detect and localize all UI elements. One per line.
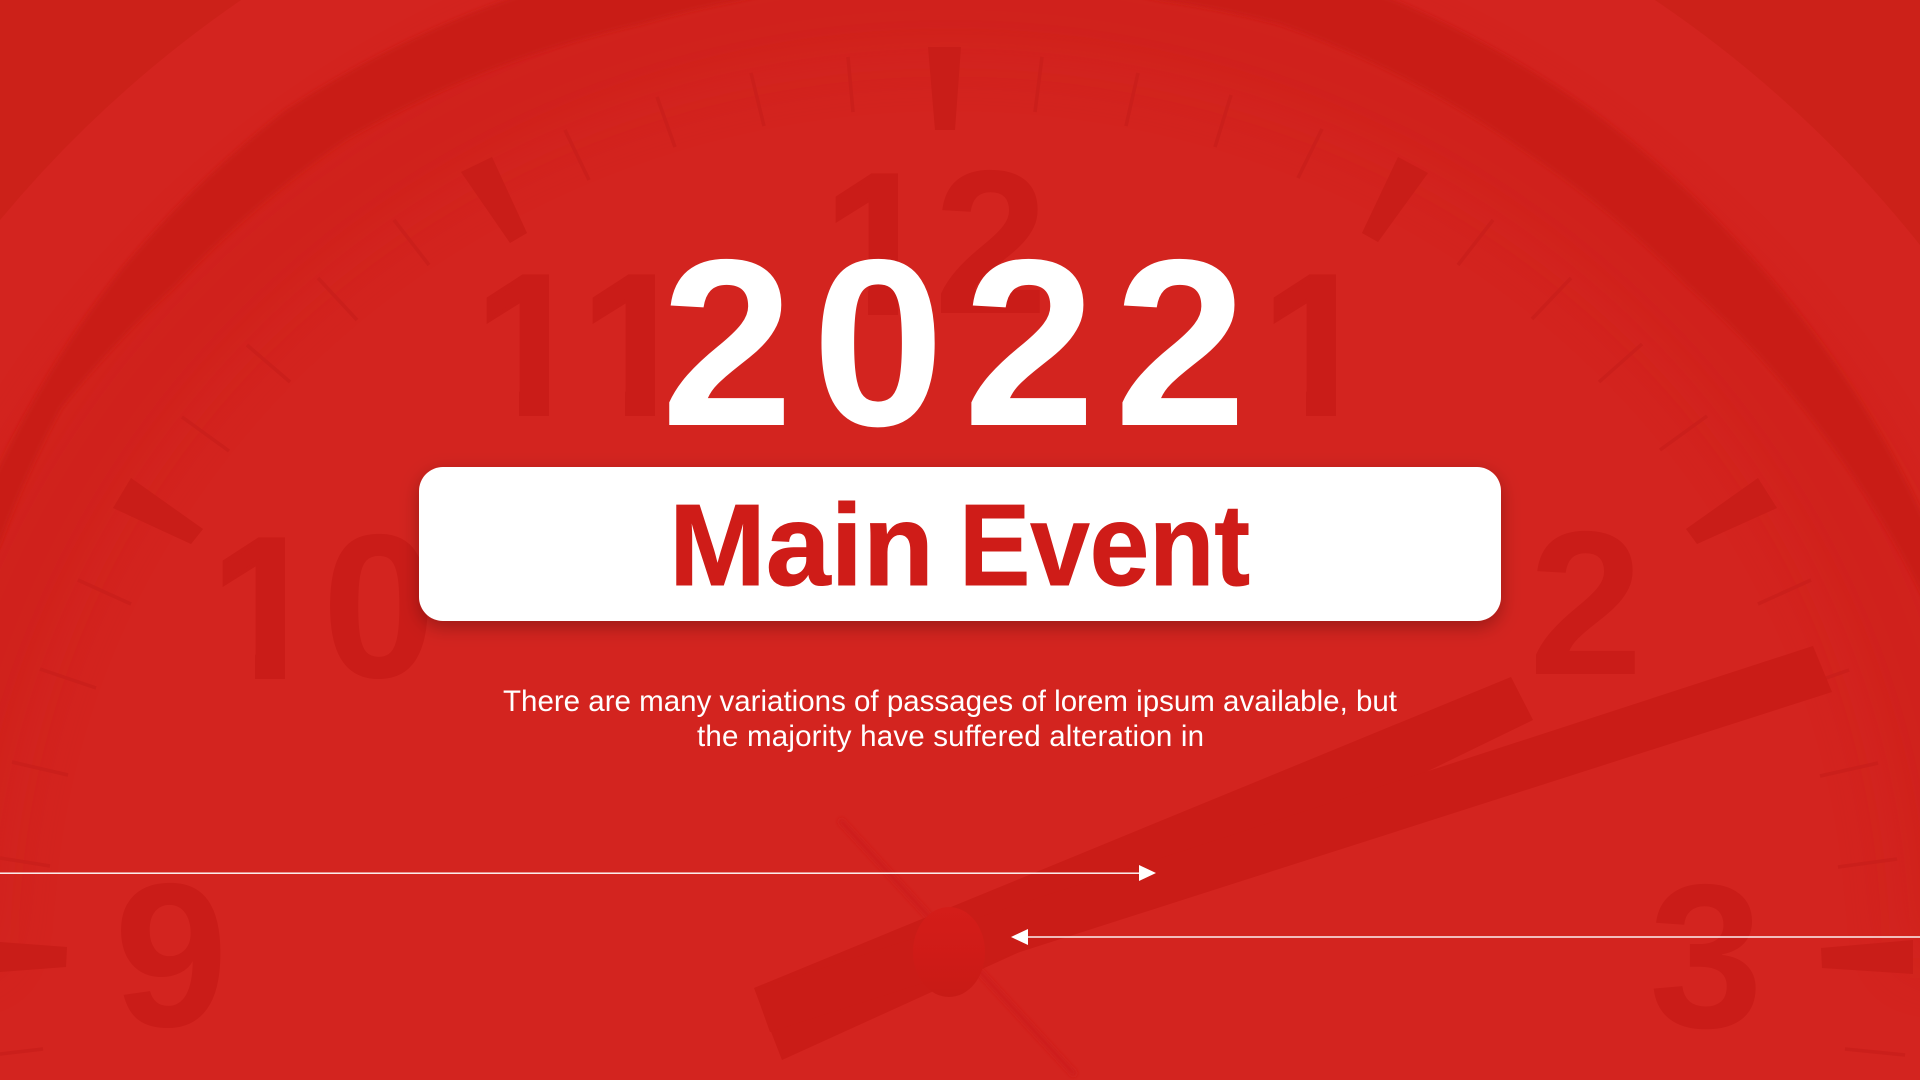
banner title: Main [669,480,934,610]
title banner [419,467,1501,621]
clock numerals [114,128,1763,1071]
clock numerals: 0 [322,492,436,721]
clock surround: top-left corner [0,0,241,220]
description text: the majority have suffered alteration in [697,720,1204,753]
year heading: 2022 [661,211,1265,476]
banner title [669,480,1250,610]
clock second hand [840,820,1075,1075]
banner title: Event [959,480,1250,610]
clock numerals: 3 [1649,842,1763,1071]
description text [503,685,1397,753]
arrow: left-pointing [1011,929,1920,945]
description text: There are many variations of passages of lorem ipsum available, but [503,685,1397,718]
clock minute hand [755,646,1832,1032]
clock numerals: 9 [114,841,228,1070]
clock numerals: 1 [475,234,586,457]
clock numerals: 1 [211,497,322,720]
arrow: right-pointing [0,865,1156,881]
clock numerals: 1 [824,133,935,356]
clock numerals: 2 [1529,489,1643,718]
clock outer ring [0,0,1920,650]
clock surround: top-right corner [1655,0,1920,245]
clock numerals: 1 [581,234,692,457]
clock hub [913,907,985,997]
clock hour hand [754,677,1533,1060]
clock numerals: 2 [934,128,1048,357]
banner box [419,467,1501,621]
clock numerals: 1 [1262,234,1373,457]
